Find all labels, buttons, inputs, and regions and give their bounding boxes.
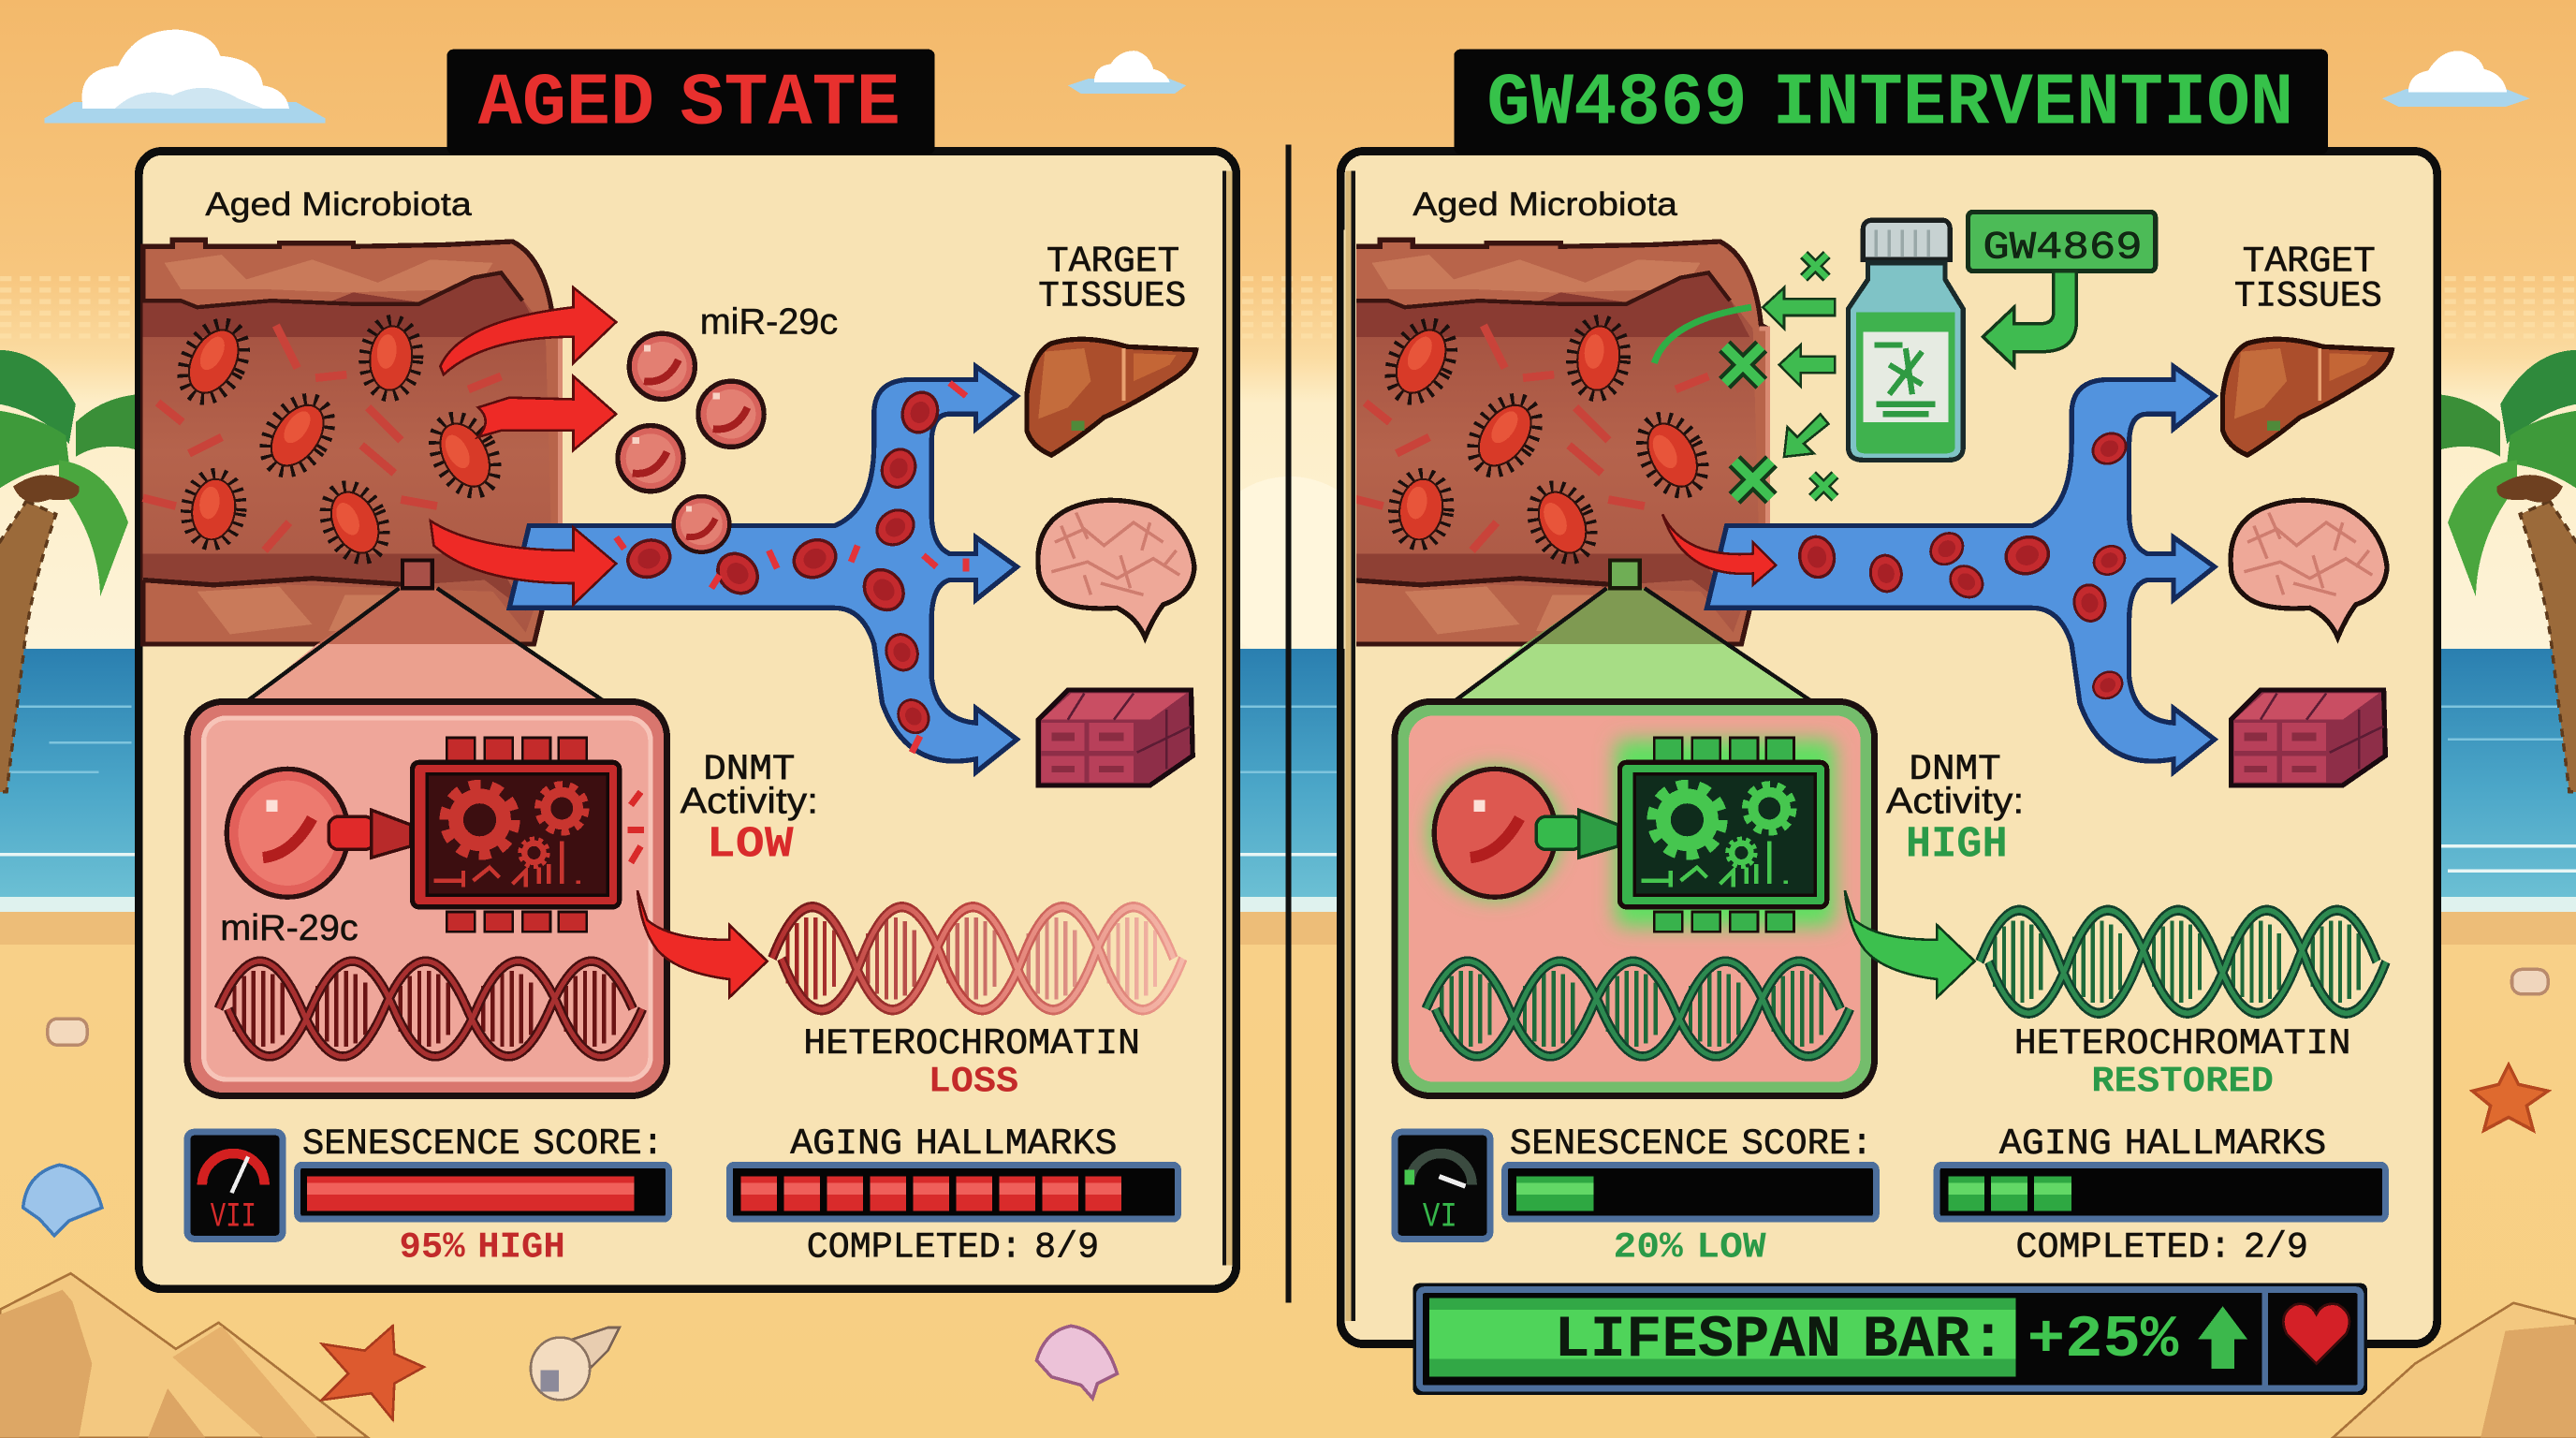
- senescence score: SENESCENCE SCORE:: [1510, 1123, 1873, 1165]
- label: miR-29c inset: miR-29c: [220, 908, 359, 948]
- senescence score: 95% HIGH: [400, 1227, 565, 1269]
- label: DNMT activity: LOW: [707, 820, 794, 870]
- blood vessel: [509, 366, 1017, 772]
- zoom callout: [246, 560, 605, 701]
- senescence score: 20% LOW: [1613, 1227, 1767, 1269]
- blocked marks: [1724, 255, 1835, 498]
- value: +25%: +25%: [2027, 1306, 2178, 1373]
- inhibitor arrows: [1763, 287, 1835, 457]
- icon: up arrow: [2198, 1306, 2247, 1369]
- arrow: to heterochromatin restored: [1845, 890, 1975, 997]
- conch shell: [531, 1328, 620, 1400]
- pincer link: [329, 810, 411, 858]
- pincer link: [1536, 810, 1618, 858]
- sea: [0, 649, 2576, 899]
- label: target tissues: TISSUES: [2234, 275, 2382, 316]
- miR-29c particles: [618, 333, 764, 552]
- aging hallmarks: [729, 1123, 1178, 1269]
- gauge: senescence VI: [1395, 1132, 1490, 1239]
- inner frame edge: [1345, 171, 1355, 1321]
- label: target tissues: TARGET: [2243, 242, 2376, 283]
- label: DNMT activity: DNMT: [703, 749, 795, 790]
- starfish bottom: [322, 1326, 424, 1419]
- label: heterochromatin loss: HETEROCHROMATIN: [803, 1023, 1140, 1064]
- label: DNMT activity: Activity:: [681, 782, 818, 822]
- panel: aged state: [139, 50, 1237, 1289]
- icon: GW4869 bottle: [1848, 220, 1963, 460]
- label: DNMT activity: DNMT: [1909, 749, 2001, 790]
- gauge: senescence VII: [187, 1132, 283, 1239]
- cloud left: [44, 30, 326, 124]
- panel: GW4869 intervention: [1340, 50, 2437, 1395]
- spark marks: [627, 792, 644, 862]
- aging hallmarks: AGING HALLMARKS: [1999, 1123, 2326, 1165]
- label: heterochromatin restored: RESTORED: [2091, 1061, 2274, 1102]
- gut with aged microbiota: [1344, 230, 1767, 649]
- icon: muscle: [1038, 690, 1193, 785]
- label: aged microbiota: Aged Microbiota: [1412, 186, 1677, 223]
- label: aged microbiota: Aged Microbiota: [205, 186, 472, 223]
- inset: DNMT restored: [1395, 701, 1875, 1096]
- label: heterochromatin restored: [2014, 1023, 2351, 1102]
- title tab: AGED STATE: [478, 62, 900, 146]
- senescence score: [298, 1123, 668, 1269]
- divider between panels: [1285, 144, 1292, 1303]
- gauge: senescence VI: VI: [1423, 1197, 1457, 1237]
- lifespan bar: [1412, 1284, 2367, 1395]
- label: DNMT activity: [681, 749, 818, 870]
- arrow: drug to gut: [1983, 271, 2076, 366]
- DNA restored: [1980, 910, 2386, 1013]
- DNMT chip, active: [1620, 738, 1827, 932]
- inset: miR-29c inhibits DNMT: [187, 701, 667, 1096]
- miR-29c sphere: [1434, 769, 1556, 897]
- label: miR-29c: miR-29c: [700, 301, 838, 342]
- miR-29c sphere: [227, 769, 348, 897]
- aging hallmarks: COMPLETED: 2/9: [2015, 1227, 2308, 1269]
- glow: [1429, 740, 1835, 927]
- aging hallmarks: COMPLETED: 8/9: [807, 1227, 1099, 1269]
- dunes left: [0, 1273, 368, 1438]
- dunes right: [2333, 1303, 2576, 1438]
- title tab: [446, 50, 935, 154]
- pebble left: [48, 1019, 87, 1045]
- label: heterochromatin loss: LOSS: [929, 1061, 1018, 1102]
- gut with aged microbiota: [143, 240, 561, 644]
- pink shell: [1036, 1326, 1117, 1399]
- progress fill: [1429, 1298, 2015, 1377]
- arrow: export 3: [431, 521, 616, 605]
- gauge: senescence VII: VII: [211, 1197, 256, 1237]
- sun: [1199, 477, 1380, 657]
- label: target tissues: [1038, 242, 1186, 316]
- icon: muscle: [2231, 690, 2385, 785]
- senescence score: SENESCENCE SCORE:: [302, 1123, 664, 1165]
- label: DNMT activity: Activity:: [1886, 782, 2024, 822]
- starfish right: [2472, 1064, 2548, 1130]
- label: target tissues: TISSUES: [1038, 275, 1186, 316]
- DNA degrading: [772, 907, 1183, 1010]
- arrow: to heterochromatin loss: [637, 890, 768, 997]
- label: lifespan bar: LIFESPAN BAR:: [1554, 1306, 2006, 1373]
- label: DNMT activity: [1886, 749, 2024, 870]
- title tab: GW4869 INTERVENTION: [1486, 62, 2293, 146]
- arrow: reduced export: [1662, 514, 1776, 585]
- label: DNMT activity: HIGH: [1906, 820, 2008, 870]
- label: heterochromatin loss: [803, 1023, 1140, 1102]
- icon: brain: [1038, 500, 1194, 638]
- DNA intact: [1426, 961, 1850, 1056]
- cloud right: [2382, 51, 2530, 107]
- pebble right: [2511, 969, 2548, 994]
- palm tree left: [0, 350, 138, 792]
- arrow: export 2: [478, 376, 616, 450]
- panel frame: [1340, 151, 2437, 1344]
- aging hallmarks: [1937, 1123, 2385, 1269]
- label: target tissues: TARGET: [1046, 242, 1179, 283]
- label: target tissues: [2234, 242, 2382, 316]
- shell: blue: [23, 1165, 102, 1236]
- sand: [0, 897, 2576, 1438]
- icon: liver: [2223, 339, 2392, 455]
- aging hallmarks: AGING HALLMARKS: [790, 1123, 1117, 1165]
- zoom callout: [1454, 560, 1812, 701]
- label: GW4869: [1969, 212, 2156, 271]
- palm tree right: [2438, 350, 2576, 792]
- senescence score: [1505, 1123, 1876, 1269]
- arrow: export 1: [440, 287, 616, 374]
- DNMT chip, inhibited: [413, 738, 620, 932]
- DNA intact: [218, 961, 642, 1056]
- label: heterochromatin restored: HETEROCHROMATIN: [2014, 1023, 2351, 1064]
- cloud middle: [1068, 51, 1186, 94]
- icon: heart: [2283, 1304, 2349, 1364]
- label: GW4869: GW4869: [1983, 226, 2143, 271]
- blocked path curve: [1654, 307, 1751, 363]
- divider: [2262, 1293, 2268, 1388]
- icon: liver: [1027, 339, 1196, 455]
- blood vessel: [1707, 366, 2215, 772]
- panel frame: [139, 151, 1237, 1289]
- icon: brain: [2231, 500, 2387, 638]
